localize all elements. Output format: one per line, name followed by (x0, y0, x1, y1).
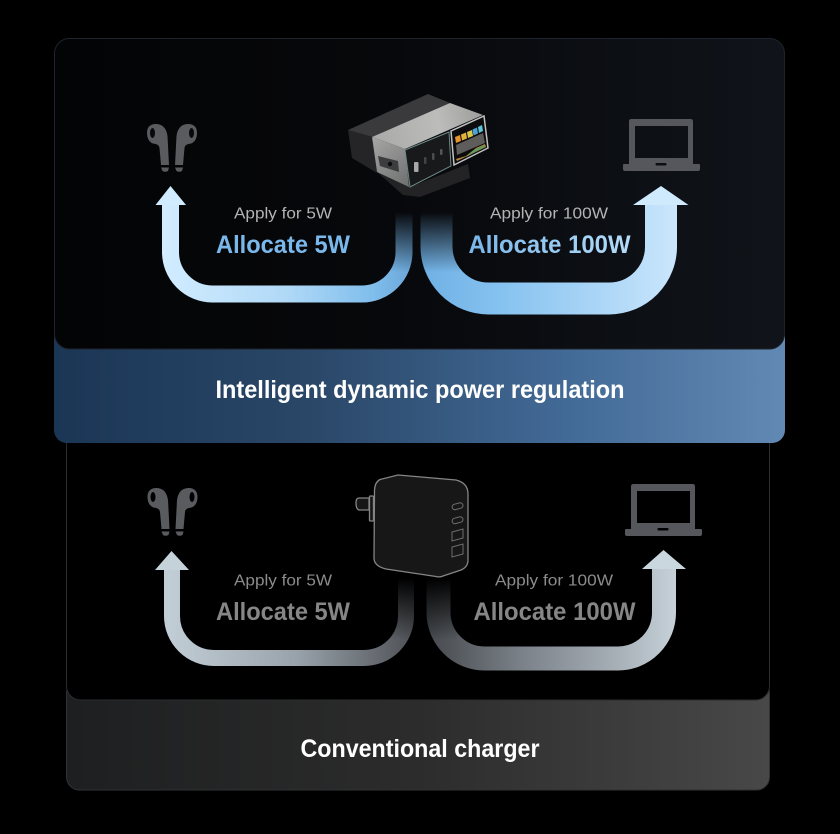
charger body (374, 475, 468, 577)
text: bottom left labels (216, 572, 350, 626)
panel: conventional charger (66, 430, 770, 790)
device top face (372, 103, 483, 149)
front panel (405, 132, 451, 187)
infographic: charger comparison (54, 38, 785, 790)
text: top left labels: Apply for 5W (234, 206, 333, 222)
display (451, 116, 488, 165)
icon: conventional wall charger (356, 475, 468, 577)
icon: earbuds bottom (148, 488, 198, 536)
icon: multi-port charger device (348, 94, 488, 197)
icon: earbuds top (147, 124, 197, 172)
arrow: bottom right to laptop (438, 550, 686, 658)
text: bottom left labels: Allocate 5W (216, 598, 350, 626)
icon: laptop bottom (625, 484, 702, 536)
text: bottom right labels: Apply for 100W (495, 572, 614, 590)
plug plate (370, 496, 374, 521)
icon: laptop top (623, 119, 700, 171)
text: top right labels: Apply for 100W (490, 206, 609, 222)
arrow: top left to earbuds (156, 186, 404, 294)
text: top right labels: Allocate 100W (468, 231, 631, 259)
label band: conventional charger (66, 680, 770, 790)
label band: intelligent regulation (54, 325, 785, 443)
text: top right labels (468, 206, 631, 259)
device side (348, 130, 377, 173)
device left face (372, 137, 409, 187)
arrow: top right to laptop (436, 186, 688, 299)
heading: conventional charger: Conventional charger (300, 735, 540, 763)
dark panel: conventional (66, 430, 770, 700)
device base (377, 164, 470, 197)
text: bottom left labels: Apply for 5W (234, 572, 333, 590)
text: top left labels (216, 206, 350, 259)
text: bottom right labels: Allocate 100W (474, 598, 636, 626)
text: bottom right labels (474, 572, 636, 626)
side port (378, 156, 399, 172)
text: top left labels: Allocate 5W (216, 231, 350, 259)
ports (452, 502, 464, 557)
heading: intelligent regulation: Intelligent dynamic power regulation (216, 376, 624, 404)
usb ports (414, 162, 418, 172)
plug prong (356, 498, 369, 510)
arrow: bottom left to earbuds (155, 551, 406, 658)
device rear shell (348, 94, 450, 137)
dark panel: intelligent (54, 38, 784, 349)
panel: intelligent regulation (54, 38, 785, 443)
